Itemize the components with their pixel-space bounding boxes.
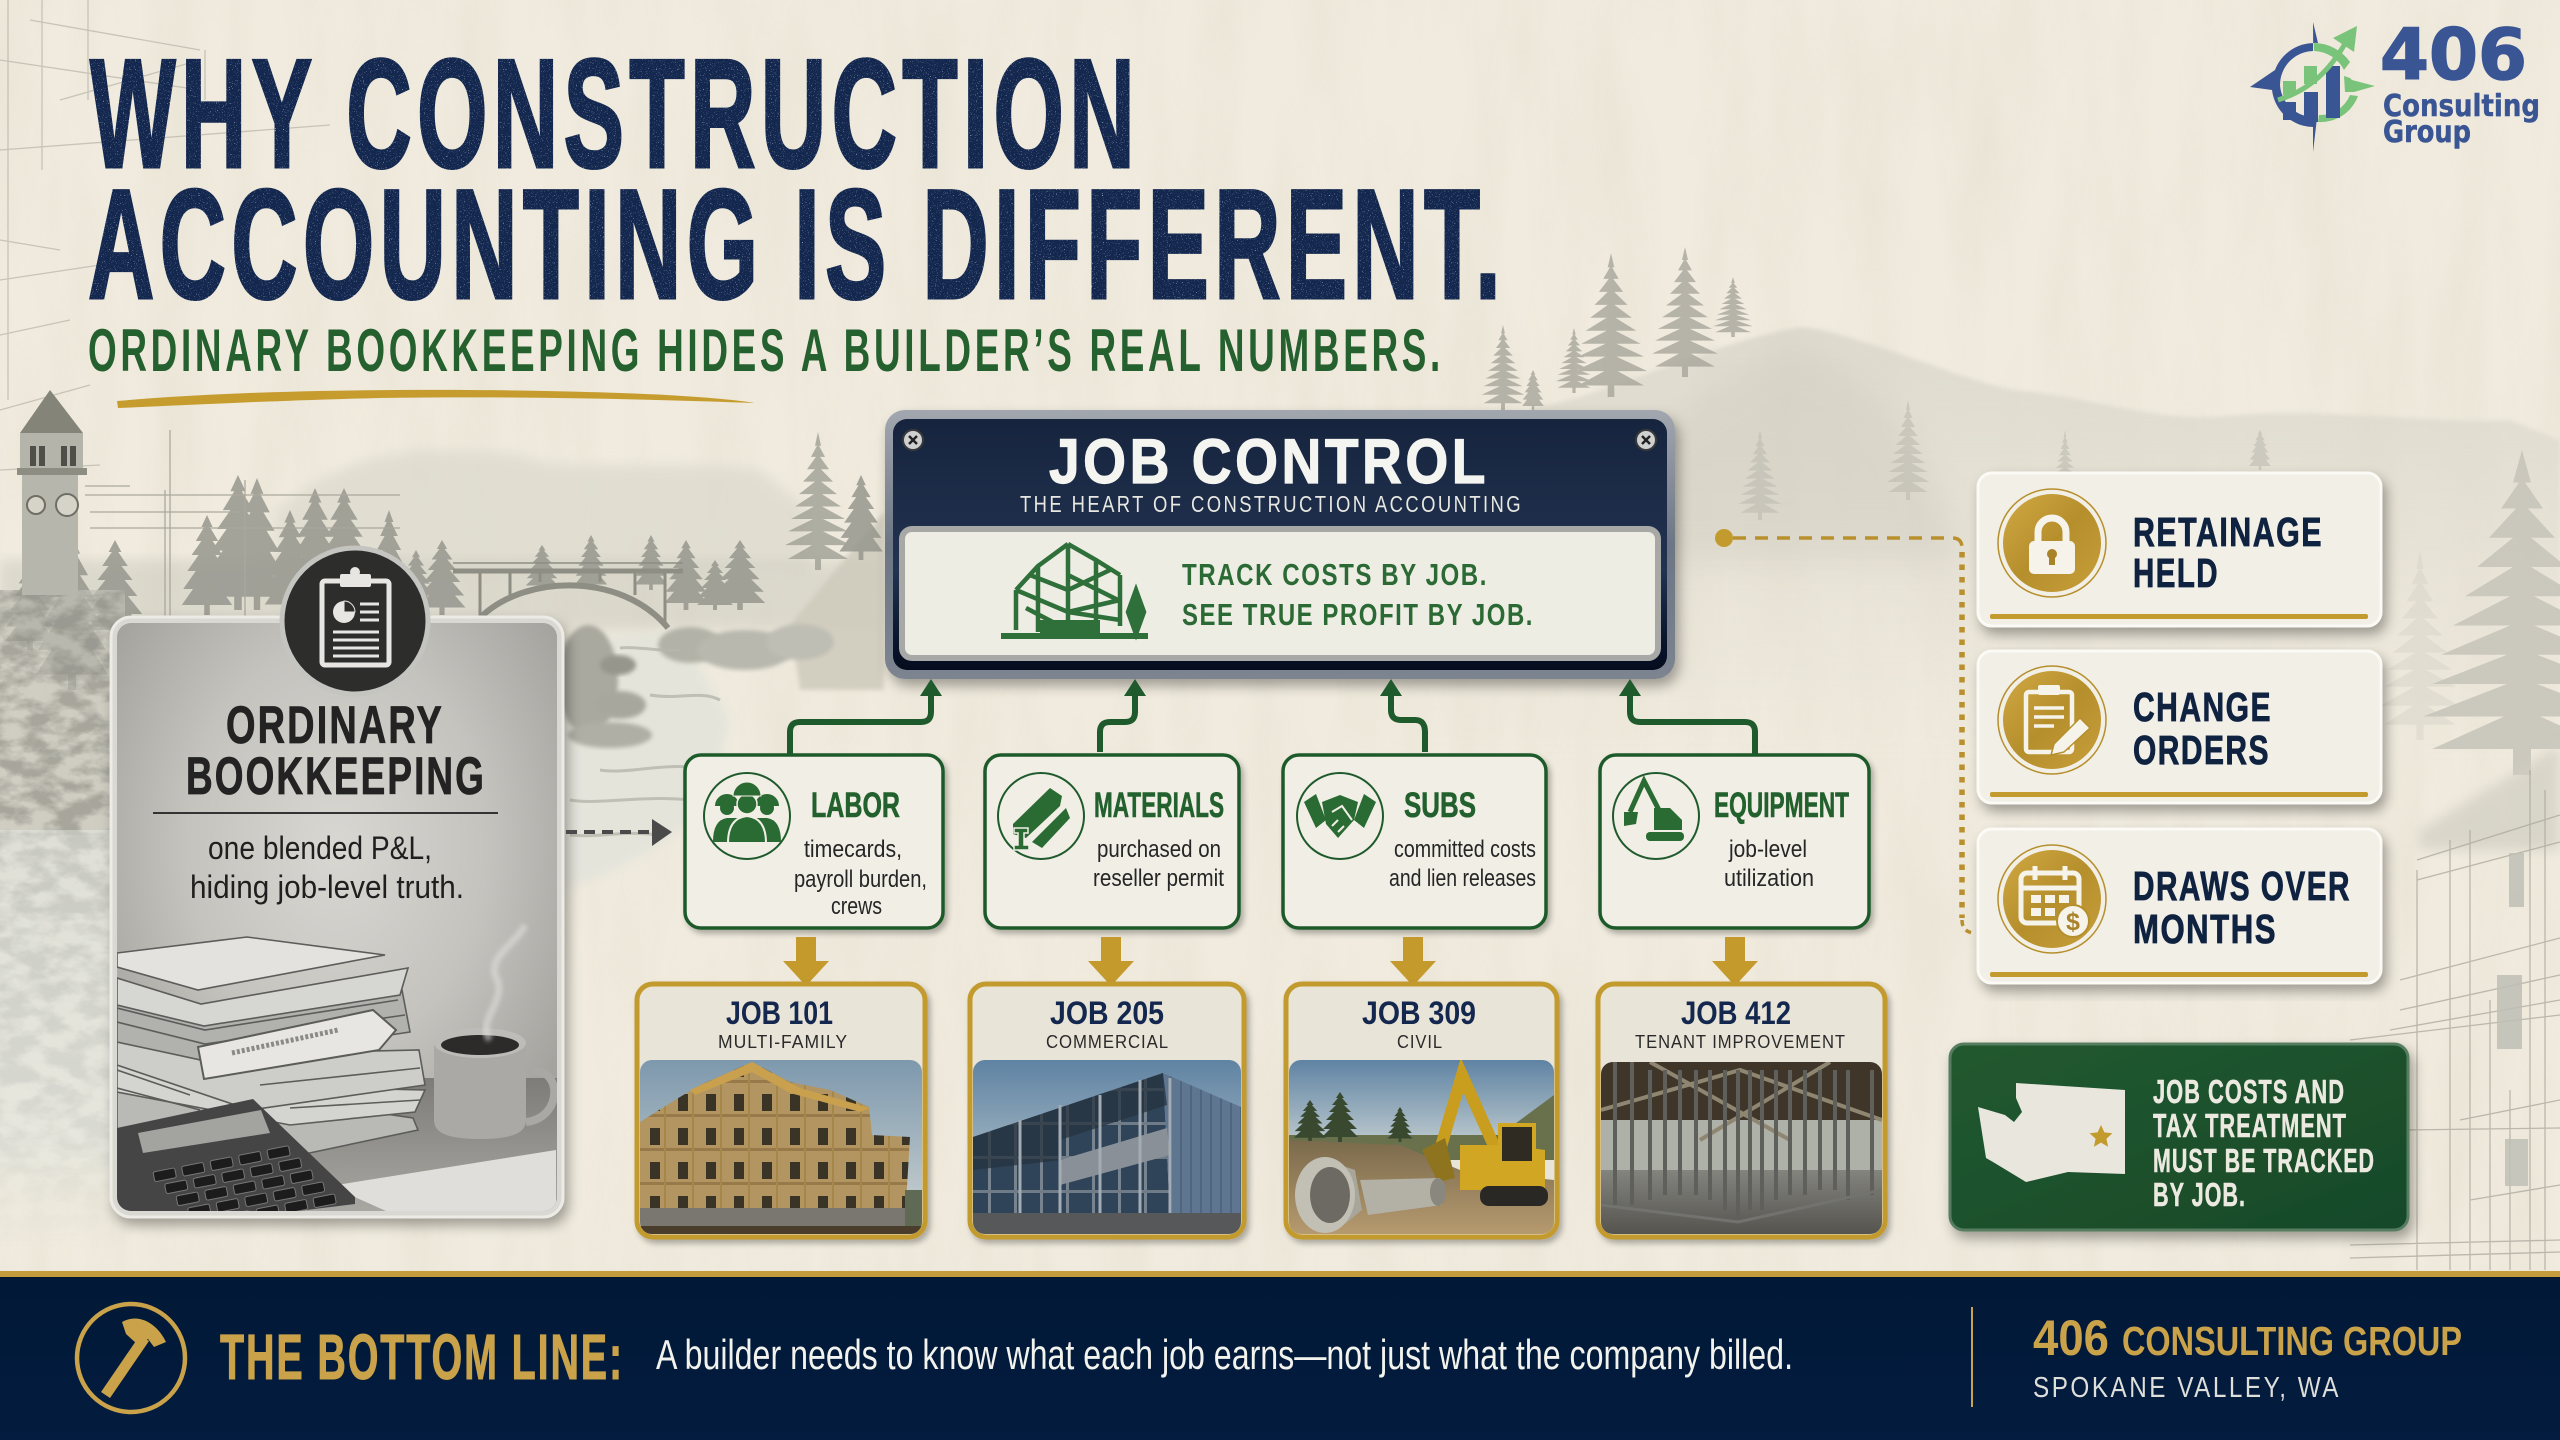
icon: calendar and dollar [1998, 845, 2106, 953]
footer brand: 406 [2033, 1310, 2109, 1366]
title: ACCOUNTING IS DIFFERENT. [88, 158, 1506, 332]
labor description: timecards, [804, 836, 902, 863]
materials description: purchased on [1097, 836, 1221, 863]
background: tall tree and blueprint building on the right [2350, 450, 2560, 1270]
card: change orders [1978, 651, 2381, 803]
dotted connector: job control to project items [1715, 529, 1974, 933]
job card: 412 tenant improvement [1598, 984, 1885, 1237]
callout text: MUST BE TRACKED [2153, 1142, 2375, 1179]
retainage text: HELD [2133, 550, 2219, 596]
photo: excavator and concrete pipes [1289, 1060, 1554, 1234]
job 309 type: CIVIL [1397, 1032, 1443, 1052]
icon: calendar and dollar: $ [2066, 908, 2080, 936]
panel heading: ORDINARY [226, 696, 444, 755]
gold brush underline [117, 390, 755, 408]
change orders text: ORDERS [2133, 727, 2270, 773]
job 412 title: JOB 412 [1681, 995, 1791, 1031]
icon: building frame [1001, 544, 1148, 636]
icon: padlock [1998, 489, 2106, 597]
draws text: MONTHS [2133, 906, 2277, 952]
job 309 title: JOB 309 [1362, 995, 1476, 1031]
illustration: desk with papers, mug and calculator [117, 925, 557, 1237]
bottom line band [0, 1271, 2560, 1440]
job card: 309 civil [1286, 984, 1557, 1237]
background: right hills and trees [1400, 247, 2560, 760]
excavator [1422, 1075, 1548, 1206]
change orders text: CHANGE [2133, 684, 2272, 730]
logo wordmark: Consulting [2383, 89, 2540, 124]
callout text: BY JOB. [2153, 1176, 2246, 1213]
panel description [190, 830, 464, 905]
panel: job control sign [885, 410, 1675, 679]
job control subheading: THE HEART OF CONSTRUCTION ACCOUNTING [1020, 491, 1523, 517]
equipment title: EQUIPMENT [1714, 786, 1849, 825]
subs title: SUBS [1404, 786, 1476, 825]
background: left rapids [0, 830, 125, 1250]
logo wordmark: Group [2383, 115, 2471, 150]
job 101 title: JOB 101 [726, 995, 833, 1031]
panel description: hiding job-level truth. [190, 869, 464, 905]
icon: workers [704, 773, 790, 859]
callout text: JOB COSTS AND [2153, 1073, 2345, 1110]
retainage text [2133, 509, 2323, 596]
callout text [2153, 1073, 2375, 1213]
labor description [794, 836, 927, 920]
footer brand: CONSULTING GROUP [2122, 1318, 2462, 1364]
footer location: SPOKANE VALLEY, WA [2033, 1372, 2341, 1404]
subs description: committed costs [1394, 836, 1536, 863]
panel: ordinary bookkeeping [111, 548, 563, 1237]
labor title: LABOR [811, 786, 900, 825]
background: river behind panel [558, 624, 834, 890]
background: left rock cliff [0, 590, 125, 835]
track costs text: SEE TRUE PROFIT BY JOB. [1182, 597, 1534, 632]
panel heading: BOOKKEEPING [186, 747, 486, 806]
card: labor [685, 755, 943, 928]
background: arched bridge [453, 563, 683, 628]
icon: clipboard and pencil [1998, 666, 2106, 774]
arrow: dashed from bookkeeping to labor [566, 819, 672, 846]
medallion: clipboard report icon [282, 548, 428, 694]
background: blueprint sketch lines top left [0, 0, 330, 470]
logo: 406 Consulting Group [2250, 14, 2540, 152]
draws text: DRAWS OVER [2133, 863, 2351, 909]
job 412 type: TENANT IMPROVEMENT [1635, 1032, 1846, 1052]
job control heading: JOB CONTROL [1049, 427, 1489, 497]
card: materials [985, 755, 1239, 928]
paper stack [117, 937, 425, 1155]
job card: 101 multi-family [637, 984, 925, 1237]
track costs text [1182, 557, 1534, 632]
background: clock tower [17, 390, 400, 640]
subtitle: ORDINARY BOOKKEEPING HIDES A BUILDER’S REAL NUMBERS. [88, 317, 1444, 384]
icon: excavator [1613, 773, 1699, 859]
connector arrows: cost categories up to job control [790, 679, 1755, 755]
draws text [2133, 863, 2351, 952]
card: equipment [1600, 755, 1869, 928]
job 205 title: JOB 205 [1050, 995, 1164, 1031]
callout: washington state job costs [1950, 1044, 2408, 1230]
job 101 type: MULTI-FAMILY [718, 1032, 848, 1052]
equipment description: job-level [1728, 836, 1807, 863]
bottom line message: A builder needs to know what each job earns—not just what the company billed. [656, 1331, 1793, 1378]
panel heading [186, 696, 486, 806]
retainage text: RETAINAGE [2133, 509, 2323, 555]
labor description: payroll burden, [794, 866, 927, 893]
paper sheet [342, 1150, 556, 1211]
labor description: crews [831, 893, 882, 920]
subs description [1389, 836, 1536, 892]
photo: steel commercial building [973, 1060, 1241, 1234]
materials description [1093, 836, 1224, 892]
logo wordmark: 406 [2380, 14, 2527, 96]
photo: steel stud interior [1601, 1062, 1882, 1234]
change orders text [2133, 684, 2272, 773]
icon: steel beams [998, 773, 1084, 859]
logo wordmark [2380, 14, 2540, 150]
gold arrows: categories down to jobs [783, 937, 1758, 986]
title [88, 27, 1506, 332]
equipment description: utilization [1724, 865, 1814, 892]
job card: 205 commercial [970, 984, 1244, 1237]
job 205 type: COMMERCIAL [1046, 1032, 1169, 1052]
screws [903, 430, 1656, 450]
panel description: one blended P&L, [208, 830, 432, 866]
icon: handshake [1297, 773, 1383, 859]
card: draws over months [1978, 829, 2381, 983]
icon: hammer [77, 1304, 185, 1412]
background: Spokane hills, forest and river [0, 390, 884, 1250]
subs description: and lien releases [1389, 865, 1536, 892]
calculator [117, 1099, 355, 1211]
track costs text: TRACK COSTS BY JOB. [1182, 557, 1488, 592]
card: subs [1283, 755, 1546, 928]
equipment description [1724, 836, 1814, 892]
coffee mug [434, 925, 554, 1139]
card: retainage held [1978, 473, 2381, 626]
callout text: TAX TREATMENT [2153, 1107, 2347, 1144]
materials description: reseller permit [1093, 865, 1224, 892]
materials title: MATERIALS [1094, 786, 1224, 825]
title: WHY CONSTRUCTION [90, 27, 1140, 200]
bottom line heading: THE BOTTOM LINE: [220, 1321, 624, 1393]
photo: wood framed building [640, 1060, 922, 1234]
inner track costs card [902, 529, 1658, 658]
icon: washington state map [1978, 1083, 2125, 1182]
logo compass icon [2250, 22, 2375, 152]
footer brand [2033, 1310, 2462, 1366]
concrete pipes [1295, 1157, 1446, 1233]
